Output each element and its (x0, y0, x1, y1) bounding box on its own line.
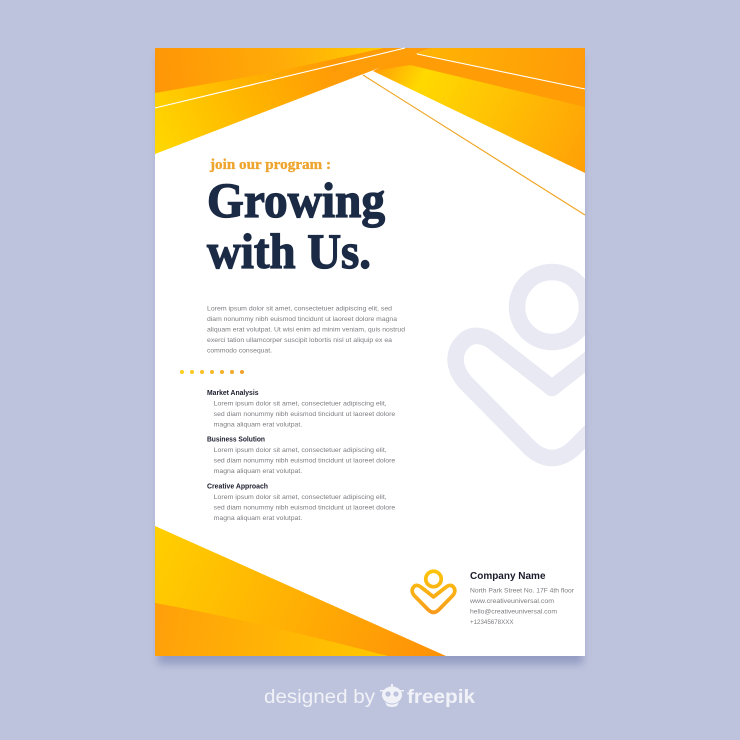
section: creative approach: sed diam nonummy nibh euismod tincidunt ut laoreet dolore (214, 504, 395, 512)
section: creative approach: Creative Approach (207, 484, 268, 490)
subheading: join our program : (209, 157, 331, 173)
section: market analysis: sed diam nonummy nibh euismod tincidunt ut laoreet dolore (214, 411, 395, 418)
section: business solution: magna aliquam erat volutpat. (214, 468, 302, 475)
title: with Us. (207, 223, 371, 279)
company details: Company Name (470, 570, 546, 582)
company details: hello@creativeuniversal.com (470, 608, 557, 615)
section: creative approach: magna aliquam erat volutpat. (214, 515, 302, 522)
intro paragraph: aliquam erat volutpat. Ut wisi enim ad minim veniam, quis nostrud (207, 326, 405, 334)
section: business solution: sed diam nonummy nibh euismod tincidunt ut laoreet dolore (214, 458, 395, 464)
thin orange diagonal line (363, 75, 585, 215)
section: market analysis: Market Analysis (207, 390, 259, 397)
footer credit (264, 684, 475, 708)
footer credit: freepik (407, 686, 475, 708)
watermark logo (448, 264, 585, 466)
company details (469, 570, 575, 626)
intro paragraph: Lorem ipsum dolor sit amet, consectetuer adipiscing elit, sed (207, 306, 392, 312)
section: business solution: Lorem ipsum dolor sit amet, consectetuer adipiscing elit, (214, 447, 387, 454)
intro paragraph: exerci tation ullamcorper suscipit lobortis nisl ut aliquip ex ea (207, 337, 392, 344)
intro paragraph: diam nonummy nibh euismod tincidunt ut laoreet dolore magna (207, 316, 397, 323)
panel: flyer page (154, 48, 586, 656)
section: business solution: Business Solution (207, 436, 265, 444)
icon: company logo (412, 571, 455, 612)
footer credit: designed by (264, 687, 376, 708)
section: business solution (207, 436, 395, 475)
top right orange shapes (373, 48, 585, 173)
icon: freepik mascot (380, 684, 404, 707)
title: Growing (207, 172, 385, 228)
title (207, 172, 385, 279)
dotted divider (180, 370, 244, 374)
section: creative approach: Lorem ipsum dolor sit amet, consectetuer adipiscing elit, (214, 494, 387, 501)
section: market analysis (207, 390, 395, 428)
company details: North Park Street No. 17F 4th floor (470, 587, 575, 594)
section: market analysis: magna aliquam erat volutpat. (214, 422, 302, 428)
page shadow (158, 56, 583, 664)
section: creative approach (207, 484, 395, 522)
intro paragraph: commodo consequat. (207, 348, 272, 354)
intro paragraph (207, 306, 405, 354)
top left orange shapes (155, 48, 431, 154)
company details: +12345678XXX (470, 619, 514, 626)
company details: www.creativeuniversal.com (469, 598, 554, 605)
bottom left orange shapes (155, 526, 446, 656)
section: market analysis: Lorem ipsum dolor sit amet, consectetuer adipiscing elit, (214, 400, 387, 408)
